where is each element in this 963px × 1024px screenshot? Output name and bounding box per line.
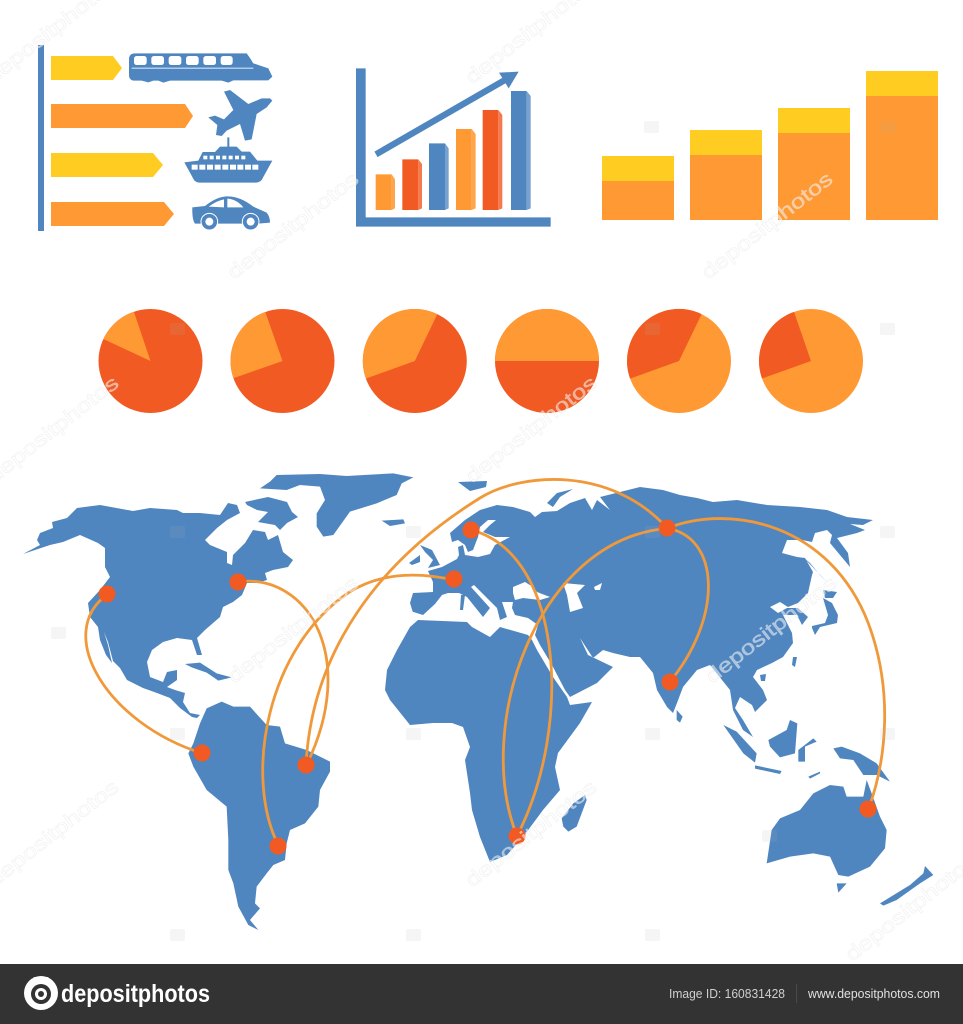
- vertical axis: [38, 45, 44, 231]
- watermarks: depositphotos: [462, 776, 601, 892]
- Sumatra: [723, 725, 757, 763]
- Borneo: [768, 720, 797, 757]
- logo wordmark: depositphotos: [61, 980, 210, 1008]
- city markers: [98, 520, 876, 854]
- route: California to Peru: [86, 594, 202, 753]
- Svalbard: [458, 481, 487, 491]
- arrow bar: plane: [51, 104, 193, 128]
- bar 6: [511, 91, 531, 210]
- Novaya Zemlya: [547, 489, 573, 507]
- South America: [188, 702, 330, 930]
- arrow bar: car: [51, 202, 174, 226]
- trend arrow: [376, 72, 519, 154]
- Hainan: [760, 674, 766, 681]
- icon: plane: [208, 90, 272, 141]
- route: Brazil to Russia: [306, 479, 667, 765]
- Madagascar: [562, 795, 587, 832]
- image id: Image ID: 160831428: [669, 987, 785, 1001]
- icon: car: [192, 196, 270, 230]
- Greenland: [260, 473, 413, 537]
- panel: world map: [23, 473, 933, 930]
- panel: growth bar chart: [356, 68, 551, 227]
- route: South Africa to Russia: [503, 528, 667, 836]
- New Zealand: [880, 866, 933, 906]
- watermarks: depositphotos: [462, 372, 601, 488]
- pie 5: [627, 309, 731, 413]
- bar 2: [402, 159, 422, 210]
- Corsica and Sardinia: [460, 595, 465, 610]
- route: Argentina to France: [263, 575, 454, 846]
- Cuba: [185, 663, 232, 681]
- watermarks: depositphotos: [842, 850, 963, 966]
- pie 1: [98, 309, 202, 413]
- pie 3: [363, 309, 467, 413]
- Java: [755, 765, 782, 774]
- chart axes: [356, 68, 551, 227]
- route: Russia to India: [667, 528, 708, 682]
- icon: train: [129, 53, 272, 83]
- panel: pie charts: [98, 309, 863, 413]
- stacked bar 1: [602, 156, 674, 220]
- bar 1: [376, 174, 395, 210]
- stacked bar 4: [866, 71, 938, 220]
- Great Britain: [420, 545, 440, 568]
- Iceland: [382, 519, 405, 526]
- stacked bar 3: [778, 108, 850, 220]
- North America: [23, 503, 293, 718]
- icon: ship: [184, 137, 272, 183]
- Eurasia: [410, 487, 873, 737]
- western hemisphere extras: [185, 473, 413, 930]
- arrow bar: train: [51, 56, 122, 80]
- Timor: [808, 772, 820, 779]
- eastern hemisphere extras: [562, 710, 933, 906]
- stacked bar 2: [690, 130, 762, 220]
- Tasmania: [837, 883, 847, 893]
- New Guinea: [833, 747, 890, 782]
- pie 4: [495, 309, 599, 413]
- route: Russia to Australia: [667, 519, 885, 809]
- watermarks: depositphotos: [698, 168, 837, 284]
- Hokkaido: [823, 590, 837, 598]
- Ireland: [409, 555, 420, 565]
- watermarks: depositphotos: [224, 168, 363, 284]
- pie 2: [230, 309, 334, 413]
- bar 5: [483, 110, 502, 210]
- continents traced in page coordinates: [23, 481, 873, 862]
- bar 4: [456, 129, 476, 210]
- Sri Lanka: [677, 710, 683, 723]
- pie 6: [759, 309, 863, 413]
- Australia: [767, 780, 887, 877]
- panel: transport comparison: [38, 45, 272, 231]
- flight routes: [86, 479, 885, 846]
- site url: www.depositphotos.com: [807, 987, 940, 1001]
- icon: camera logo: [24, 976, 58, 1010]
- watermarks: depositphotos: [224, 572, 363, 688]
- Honshu and Kyushu: [812, 598, 838, 635]
- panel: stacked bars: [602, 71, 938, 220]
- route: Sweden to South Africa: [471, 530, 552, 836]
- Arctic islands: [245, 497, 298, 530]
- bar 3: [429, 143, 449, 210]
- watermarks: depositphotos: [702, 572, 841, 688]
- Africa: [385, 620, 592, 862]
- footer bar: [0, 964, 963, 1024]
- arrow bar: ship: [51, 153, 163, 177]
- route: New York to Brazil: [238, 581, 328, 766]
- Sakhalin: [803, 557, 827, 582]
- Sulawesi: [798, 738, 817, 762]
- Taiwan: [792, 657, 797, 667]
- watermark camera marks: [51, 121, 896, 941]
